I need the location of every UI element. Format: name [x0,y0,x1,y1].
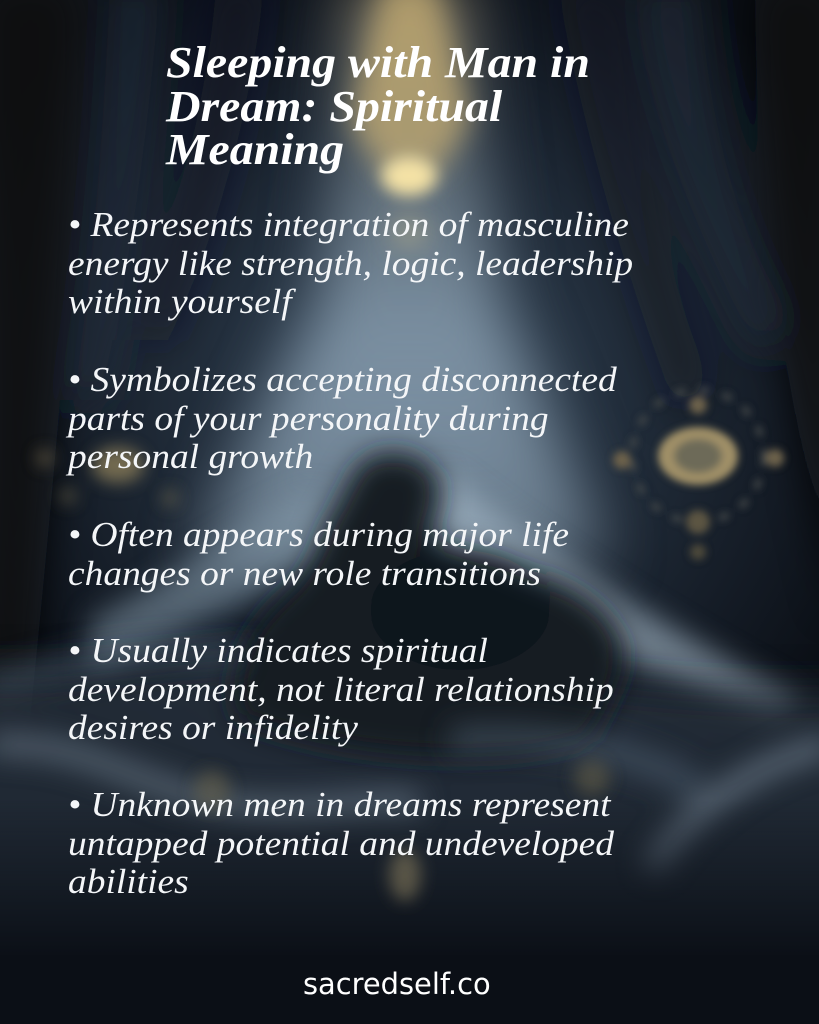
mandala ornament right [613,390,784,560]
bullet 1: within yourself [68,282,292,321]
bullet 4: • Usually indicates spiritual [68,631,488,670]
bullet 2: personal growth [68,437,313,476]
title [165,38,590,174]
bed base [0,648,819,1024]
bullet 4 [68,631,614,747]
bullet 1: energy like strength, logic, leadership [68,244,633,283]
footer: website: sacredself.co [303,967,491,1001]
bedding waves [0,651,819,870]
lower glows [194,760,610,901]
title: Dream: Spiritual [166,82,502,130]
bottom fade [0,800,819,960]
bullet 2 [66,360,617,476]
figure [234,452,623,757]
bullet 5: untapped potential and undeveloped [68,824,614,863]
bullet 4: development, not literal relationship [68,670,614,709]
bullet 5 [68,785,614,901]
bullet 5: abilities [68,862,189,901]
light beam [190,0,610,560]
bullet 2: • Symbolizes accepting disconnected [68,360,617,399]
bullet 4: desires or infidelity [68,708,358,747]
bullet 3 [68,515,569,593]
ornament left [37,447,178,506]
bullet 3: changes or new role transitions [68,554,541,593]
sheet highlights beside figure [90,470,800,725]
bullet 5: • Unknown men in dreams represent [68,785,611,824]
lamp glow [350,0,470,246]
curtains [0,0,819,720]
bullet 1: • Represents integration of masculine [68,205,629,244]
title: Meaning [166,125,344,174]
title: Sleeping with Man in [166,38,590,87]
bullet 3: • Often appears during major life [68,515,569,554]
bullet 2: parts of your personality during [68,399,549,438]
bullet 1 [68,205,633,321]
